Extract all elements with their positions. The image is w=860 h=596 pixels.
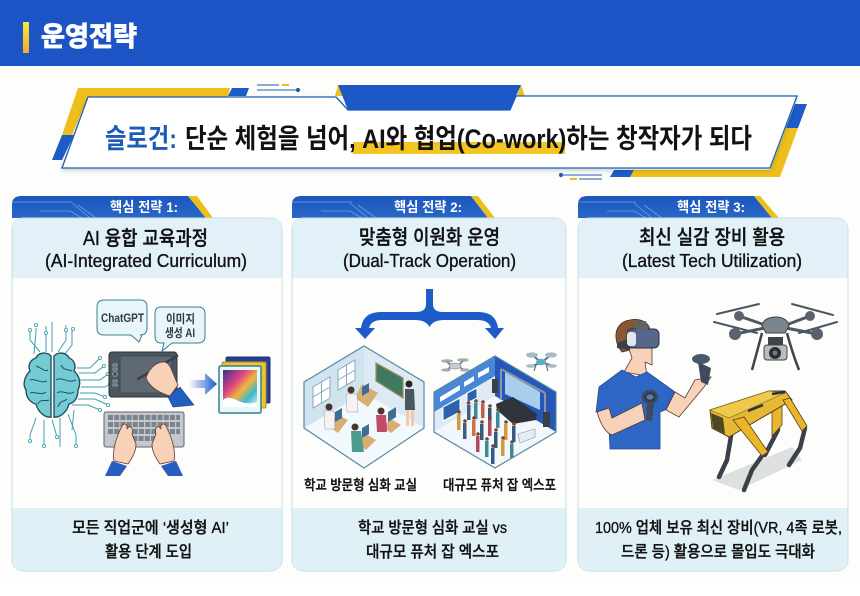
caption: strategy 2: 대규모 퓨처 잡 엑스포 <box>366 543 499 561</box>
windows <box>313 377 330 408</box>
heading: strategy 3: (Latest Tech Utilization) <box>622 251 802 271</box>
tab: strategy 3: 핵심 전략 3: <box>677 199 745 215</box>
illustration: quadcopter drone <box>714 304 837 370</box>
banner circuit lines <box>257 85 602 179</box>
tab: strategy 2 <box>292 196 495 218</box>
tab: strategy 2: 핵심 전략 2: <box>394 199 462 215</box>
icon: generated images <box>219 357 270 413</box>
caption: strategy 1: 모든 직업군에 ‘생성형 AI’ <box>72 519 229 537</box>
desks and students <box>324 383 401 452</box>
illustration: yellow robot dog <box>710 391 807 490</box>
stage screen and truss <box>505 372 540 410</box>
icon: circuit brain <box>24 322 112 448</box>
tab: strategy 1 <box>12 196 213 218</box>
heading: strategy 3 <box>622 226 802 271</box>
heading: strategy 2: (Dual-Track Operation) <box>343 251 516 271</box>
bubble: image generation AI: 이미지 <box>166 312 195 326</box>
illustration: expo hall <box>434 356 556 468</box>
illustration: classroom <box>304 346 424 468</box>
wall panels <box>440 367 489 402</box>
arrow: split two-way <box>355 289 504 339</box>
icon: teal drone <box>526 352 557 371</box>
label: school classroom: 학교 방문형 심화 교실 <box>304 477 417 493</box>
slogan banner <box>52 84 807 180</box>
slogan label: 슬로건: <box>105 124 177 154</box>
controllers <box>643 354 711 421</box>
exhibition screens <box>443 398 460 421</box>
crowd <box>457 403 516 464</box>
caption: strategy 1 <box>72 519 229 561</box>
title: 운영전략 <box>41 22 137 52</box>
panel: strategy 3 <box>578 196 848 571</box>
bubble: ChatGPT: ChatGPT <box>101 311 145 325</box>
bubble: ChatGPT <box>97 300 147 342</box>
caption: strategy 1: 활용 단계 도입 <box>105 543 192 561</box>
tab: strategy 3 <box>578 196 779 218</box>
heading: strategy 1: (AI-Integrated Curriculum) <box>45 251 247 271</box>
arrow: to image output <box>190 373 217 395</box>
blackboard <box>376 363 403 398</box>
icon: grey drone <box>441 358 470 372</box>
caption: strategy 2 <box>358 519 507 561</box>
icon: keyboard with hands <box>104 412 184 476</box>
icon: drawing tablet <box>109 352 194 407</box>
bubble: image generation AI <box>155 307 205 351</box>
header accent bar <box>23 22 29 53</box>
teacher <box>405 380 415 426</box>
heading: strategy 2: 맞춤형 이원화 운영 <box>359 226 500 249</box>
panel: strategy 2 <box>292 196 566 571</box>
stage <box>496 397 537 424</box>
panel: strategy 1 <box>12 196 282 571</box>
bubble: image generation AI: 생성 AI <box>165 326 195 340</box>
heading: strategy 2 <box>343 226 516 271</box>
caption: strategy 2: 학교 방문형 심화 교실 vs <box>358 519 507 537</box>
illustration: person with VR headset <box>596 319 711 449</box>
tab: strategy 1: 핵심 전략 1: <box>110 199 178 215</box>
heading: strategy 1 <box>45 227 247 271</box>
heading: strategy 1: AI 융합 교육과정 <box>83 227 208 250</box>
header bar <box>0 0 860 66</box>
slogan highlight <box>353 142 565 154</box>
label: expo: 대규모 퓨처 잡 엑스포 <box>443 477 556 493</box>
heading: strategy 3: 최신 실감 장비 활용 <box>639 226 785 249</box>
slogan text: 단순 체험을 넘어, AI와 협업(Co-work)하는 창작자가 되다 <box>185 124 752 154</box>
reception desk <box>518 429 535 443</box>
caption: strategy 3 <box>595 519 842 561</box>
caption: strategy 3: 드론 등) 활용으로 몰입도 극대화 <box>621 543 815 561</box>
